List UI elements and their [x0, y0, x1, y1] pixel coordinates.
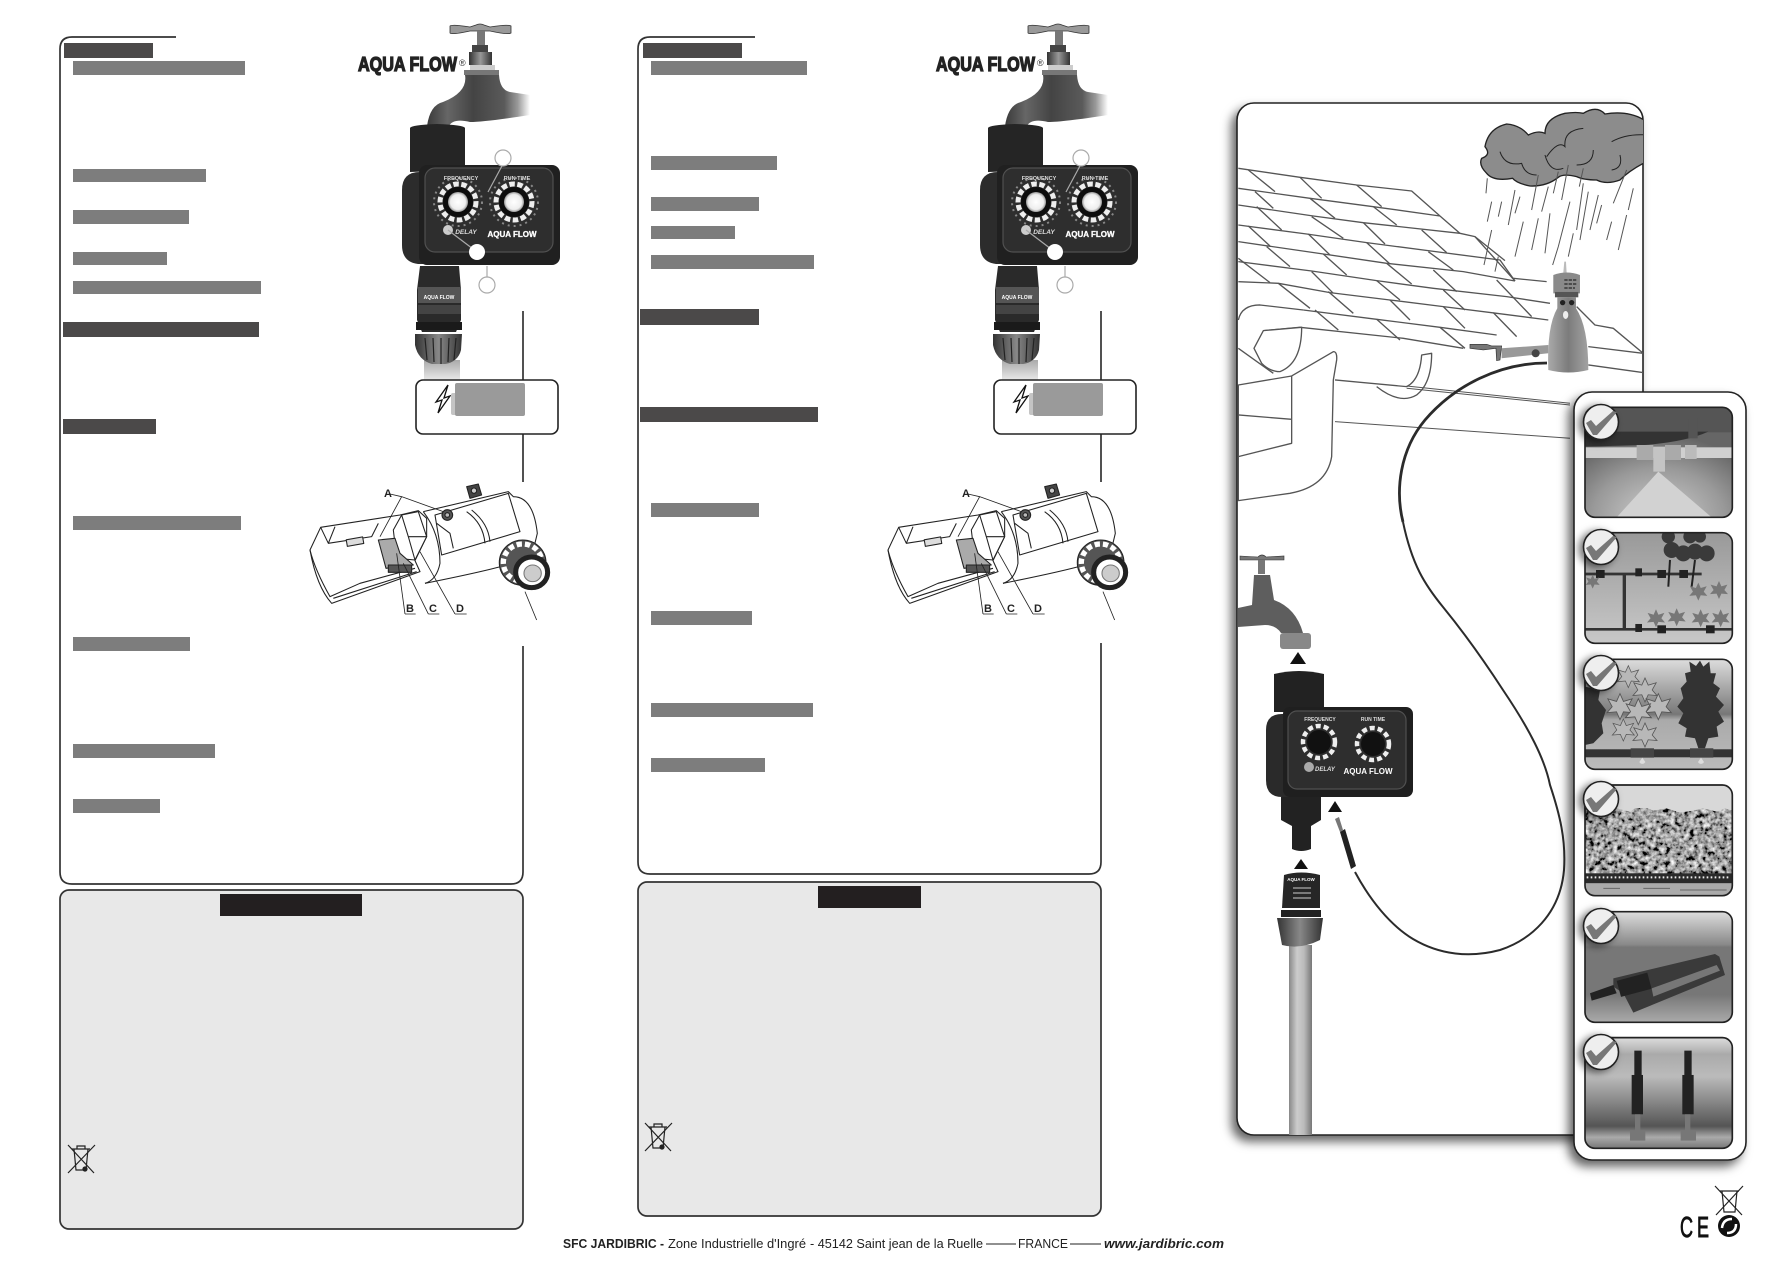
faucet [1238, 555, 1311, 649]
footer address: FRANCE [1018, 1236, 1068, 1251]
thumbnail: shrubs and trees [1585, 659, 1732, 769]
valve labels [384, 488, 464, 615]
valve labels: B [984, 603, 992, 615]
roof shingles and gutter [1238, 168, 1643, 501]
logo registered mark: ® [459, 58, 466, 68]
valve labels: C [429, 603, 437, 615]
panel: left warning box [60, 890, 523, 1229]
timer labels [1002, 176, 1115, 301]
panel: middle warning box [638, 882, 1101, 1216]
warning title bar [818, 886, 921, 908]
rain sensor [1470, 262, 1588, 372]
timer labels: AQUA FLOW [487, 230, 537, 239]
thumbnail: hedge [1585, 785, 1732, 897]
cable plug [1335, 817, 1356, 869]
timer: DELAY [1315, 767, 1336, 773]
timer labels: RUN TIME [1082, 176, 1109, 182]
icon: crossed-out bin, CE mark, green dot [1680, 1186, 1743, 1244]
icons: check marks [1584, 404, 1618, 1070]
thumbnail: drip on tomatoes [1585, 530, 1732, 643]
hose connector and hose: AQUA FLOW [1287, 877, 1316, 882]
panel: left instructions frame [60, 37, 523, 884]
subheading bars [651, 61, 814, 772]
logo: Aqua Flow: AQUA FLOW [358, 54, 457, 76]
timer [1266, 671, 1413, 851]
timer labels: RUN TIME [504, 176, 531, 182]
valve labels: D [1034, 603, 1042, 615]
logo and timer unit illustration, middle [888, 24, 1138, 620]
timer: AQUA FLOW [1343, 767, 1393, 776]
logo: Aqua Flow: AQUA FLOW [936, 54, 1035, 76]
footer address [563, 1236, 1224, 1251]
subheading bars [73, 61, 261, 813]
panel: compatible systems [1574, 392, 1746, 1160]
heading bar 1 [643, 43, 742, 58]
footer address: SFC JARDIBRIC - [563, 1236, 664, 1251]
valve labels: B [406, 603, 414, 615]
sensor cable [1399, 363, 1547, 522]
valve labels: C [1007, 603, 1015, 615]
timer labels: AQUA FLOW [424, 295, 455, 301]
valve labels: A [962, 488, 970, 500]
logo and timer unit illustration, left [310, 24, 560, 620]
icon: crossed-out bin, CE mark, green dot: C [1680, 1212, 1693, 1244]
hose connector and hose [1277, 872, 1323, 1135]
footer address: - 45142 Saint jean de la Ruelle [810, 1236, 983, 1251]
warning title bar [220, 894, 362, 916]
timer labels: FREQUENCY [444, 176, 479, 182]
panel: installation illustration [1237, 103, 1647, 1135]
timer: RUN TIME [1361, 717, 1386, 723]
heading bar 1 [64, 43, 153, 58]
valve labels: D [456, 603, 464, 615]
timer labels: DELAY [1033, 229, 1055, 236]
arrows [1290, 652, 1342, 869]
icon: crossed-out bin [645, 1123, 672, 1151]
footer address: Zone Industrielle d'Ingré [668, 1236, 806, 1251]
footer address: www.jardibric.com [1104, 1236, 1224, 1251]
valve labels [962, 488, 1042, 615]
thumbnail: oscillating sprinkler [1585, 912, 1732, 1022]
icon: crossed-out bin [68, 1145, 95, 1173]
timer labels: AQUA FLOW [1065, 230, 1115, 239]
thumbnail: pop-up sprinklers [1585, 1038, 1732, 1148]
timer labels: AQUA FLOW [1002, 295, 1033, 301]
panel: middle instructions frame [638, 37, 1101, 874]
heading bars 2 and 3 [63, 322, 259, 434]
timer labels: FREQUENCY [1022, 176, 1057, 182]
thumbnail: misting [1585, 407, 1732, 517]
cloud with rain [1481, 109, 1647, 272]
logo registered mark: ® [1037, 58, 1044, 68]
timer: FREQUENCY [1304, 717, 1336, 723]
icon: crossed-out bin, CE mark, green dot: E [1697, 1212, 1709, 1244]
timer labels: DELAY [455, 229, 477, 236]
timer labels [424, 176, 537, 301]
heading bars 2 and 3 [640, 309, 818, 422]
valve labels: A [384, 488, 392, 500]
